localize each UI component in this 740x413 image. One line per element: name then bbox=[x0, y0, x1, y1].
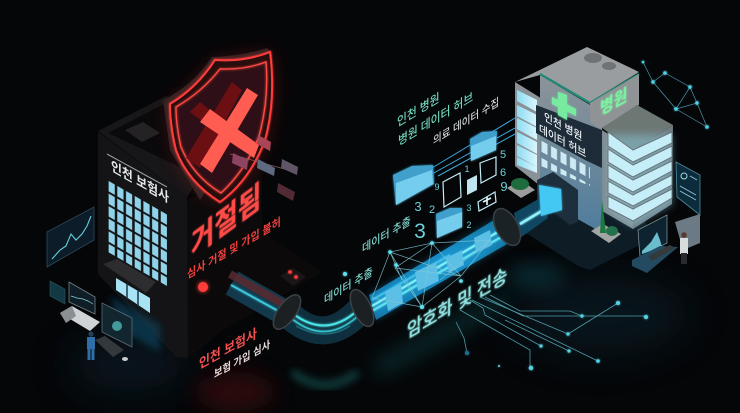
folder top bbox=[470, 131, 497, 161]
upper right face bbox=[590, 74, 639, 130]
main roof bbox=[515, 47, 639, 102]
door pipe section bbox=[514, 197, 548, 238]
green roof trim bbox=[540, 74, 639, 103]
building left face bbox=[98, 132, 188, 358]
card bbox=[232, 153, 248, 170]
rejected heading: 거절됨 bbox=[191, 178, 261, 264]
id card bbox=[467, 175, 477, 195]
folder icons bbox=[393, 131, 497, 238]
shield glow bbox=[170, 52, 272, 202]
insurer caption: 보험 가입 심사 bbox=[214, 337, 270, 381]
encryption label: 암호화 및 전송 bbox=[407, 263, 507, 343]
floating numbers: 2 bbox=[429, 204, 435, 216]
hospital entrance bbox=[537, 172, 578, 225]
floating numbers: 3 bbox=[466, 203, 472, 213]
red indicator bbox=[198, 282, 208, 292]
pipe joint two bbox=[345, 286, 379, 330]
control box bbox=[280, 268, 306, 286]
floating cards bbox=[230, 135, 298, 201]
monitor bbox=[69, 282, 95, 314]
hospital workstation bbox=[632, 214, 700, 273]
data stream to hospital bbox=[432, 118, 515, 176]
console bbox=[632, 246, 678, 273]
pipe bend bbox=[287, 308, 362, 330]
kit cross bbox=[483, 197, 491, 205]
connector bbox=[230, 154, 288, 170]
window grid bbox=[108, 180, 167, 286]
building right face bbox=[187, 165, 262, 358]
green cross bbox=[552, 92, 576, 120]
left wing face bbox=[515, 82, 596, 230]
pipe data streams bbox=[372, 226, 510, 311]
clipboard bbox=[480, 157, 496, 183]
floating numbers: 3 bbox=[414, 220, 426, 243]
server rack bbox=[675, 214, 700, 250]
hospital building bbox=[507, 47, 673, 270]
folder small bbox=[436, 208, 462, 238]
right tower left face bbox=[602, 130, 633, 229]
tower window glow bbox=[608, 135, 672, 226]
card bbox=[277, 183, 295, 201]
x mark bbox=[200, 88, 259, 173]
x shadow bbox=[186, 82, 246, 168]
hospital name: 인천 병원 bbox=[397, 90, 440, 130]
building name: 인천 보험사 bbox=[111, 158, 169, 206]
card bbox=[257, 135, 271, 151]
building roof bbox=[98, 96, 230, 197]
platform bbox=[518, 200, 650, 270]
insurer floor label bbox=[199, 325, 270, 381]
extraction label lower: 데이터 추출 bbox=[324, 264, 373, 307]
pipe joint one bbox=[268, 290, 306, 334]
left chart screen bbox=[47, 207, 94, 267]
floating numbers: 3 bbox=[414, 199, 422, 214]
top right network bbox=[642, 61, 709, 129]
floating numbers: 1 bbox=[464, 164, 470, 174]
shield bbox=[163, 48, 272, 202]
shield inner line bbox=[176, 62, 267, 193]
central tower face bbox=[540, 75, 602, 232]
document bbox=[443, 173, 461, 207]
keyboard bbox=[95, 336, 124, 357]
central windows bbox=[541, 139, 590, 186]
right tower right face bbox=[633, 125, 673, 229]
insurer pipe section bbox=[232, 283, 285, 313]
hospital pipe section bbox=[369, 214, 514, 320]
keyboard bbox=[648, 245, 675, 261]
entrance glow bbox=[110, 296, 160, 352]
tower window bands bbox=[608, 132, 672, 221]
monitor chart bbox=[642, 232, 662, 254]
sign text two: 데이터 허브 bbox=[539, 121, 586, 161]
planter left bbox=[507, 178, 535, 198]
information panel bbox=[676, 162, 700, 215]
hub name: 병원 데이터 허브 bbox=[398, 90, 473, 149]
circuit lines bbox=[456, 295, 646, 368]
floating numbers: 9 bbox=[434, 182, 440, 192]
person bbox=[87, 331, 95, 360]
network nodes bbox=[343, 241, 463, 309]
floating numbers: 9 bbox=[500, 179, 508, 194]
rejected subheading: 심사 거절 및 가입 불허 bbox=[187, 214, 281, 282]
entrance doors bbox=[116, 278, 150, 313]
computer bbox=[60, 306, 76, 323]
entrance light bbox=[539, 185, 562, 216]
mouse bbox=[122, 357, 128, 361]
building base plinth bbox=[177, 232, 322, 358]
hospital sign band bbox=[536, 105, 602, 168]
door frames bbox=[127, 284, 138, 306]
side panel bbox=[50, 281, 65, 304]
collection caption: 의료 데이터 수집 bbox=[433, 94, 499, 148]
floating numbers: 6 bbox=[500, 167, 506, 179]
card bbox=[257, 159, 275, 176]
pipe folders bbox=[385, 230, 492, 311]
roof vent bbox=[125, 122, 160, 142]
encryption network bbox=[372, 240, 490, 307]
data pipe bbox=[230, 214, 514, 334]
sign text one: 인천 병원 bbox=[544, 109, 582, 144]
insurer name: 인천 보험사 bbox=[199, 325, 257, 372]
roof units bbox=[584, 53, 616, 70]
left workstation bbox=[50, 281, 132, 361]
floating numbers: 5 bbox=[500, 149, 506, 161]
card bbox=[281, 159, 298, 175]
folder large bbox=[393, 165, 434, 205]
circuit nodes bbox=[465, 301, 648, 370]
extraction label upper: 데이터 추출 bbox=[362, 213, 411, 256]
left wing windows bbox=[517, 90, 537, 173]
medical document icons bbox=[443, 157, 496, 211]
large monitor bbox=[102, 303, 132, 347]
shield extrusion bbox=[163, 48, 272, 200]
pipe joint three bbox=[488, 204, 526, 250]
hospital labels bbox=[397, 90, 499, 149]
desk bbox=[60, 306, 100, 331]
insurance building bbox=[98, 96, 322, 358]
right tower roof bbox=[602, 105, 673, 150]
floating numbers: 2 bbox=[466, 220, 472, 230]
floor glows bbox=[70, 265, 690, 412]
roof inner bbox=[108, 103, 205, 167]
hospital green label: 병원 bbox=[600, 85, 628, 119]
planter right bbox=[591, 200, 621, 243]
floating numbers bbox=[414, 149, 508, 243]
doctor bbox=[680, 232, 688, 264]
entrance awning bbox=[103, 259, 156, 293]
shield body bbox=[170, 52, 272, 202]
medical kit bbox=[478, 192, 496, 211]
wall monitor bbox=[638, 215, 667, 257]
sign rail bbox=[107, 154, 167, 187]
